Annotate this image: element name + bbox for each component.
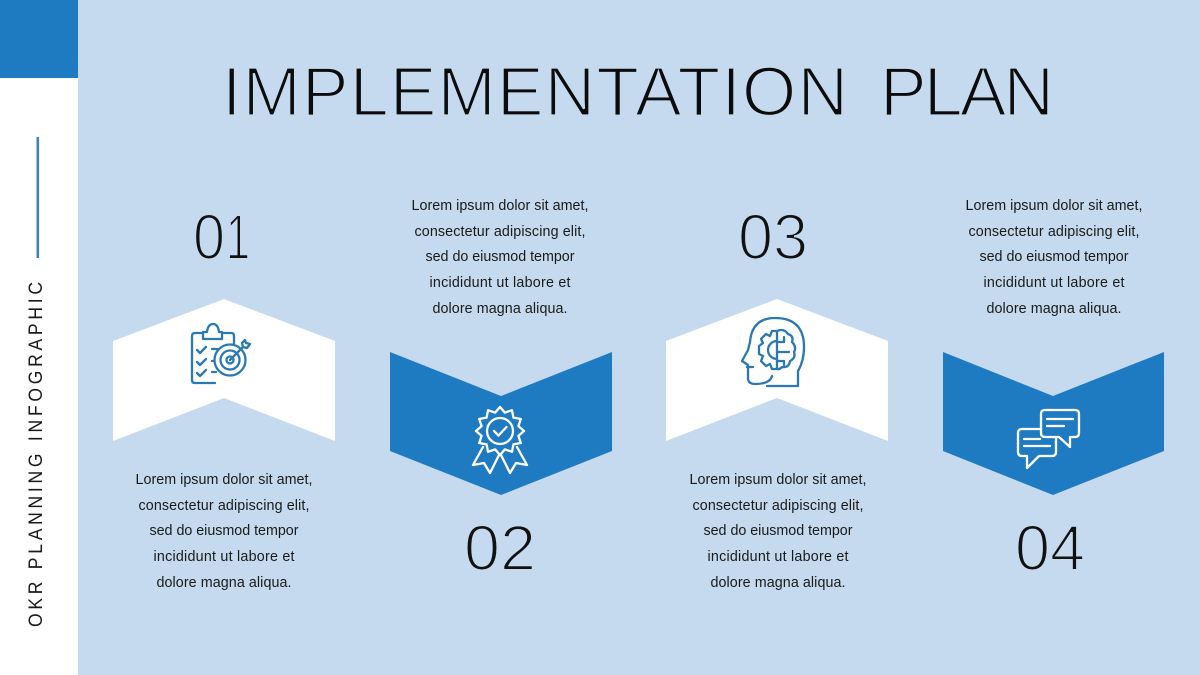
step 02 text xyxy=(412,198,588,317)
step 01 number xyxy=(193,201,250,273)
sidebar xyxy=(0,0,78,675)
step 03 text: incididunt ut labore et xyxy=(708,549,849,565)
step 03 number: 03 xyxy=(738,201,808,273)
step 01 number: 0 xyxy=(193,201,225,273)
step 02 xyxy=(390,198,612,584)
sidebar blue block xyxy=(0,0,78,78)
step 02 text: dolore magna aliqua. xyxy=(432,301,568,317)
step 02 text: Lorem ipsum dolor sit amet, xyxy=(412,198,588,214)
step 04 text: incididunt ut labore et xyxy=(984,275,1125,291)
step 03 text: consectetur adipiscing elit, xyxy=(692,498,864,514)
step 01 text xyxy=(136,472,312,591)
step 04 text: sed do eiusmod tempor xyxy=(980,249,1129,265)
step 03 shape xyxy=(666,299,888,441)
icon: head with gear and brain xyxy=(742,318,804,386)
step 04 text: consectetur adipiscing elit, xyxy=(968,224,1140,240)
step 03 text: dolore magna aliqua. xyxy=(710,575,846,591)
step 01 number: 1 xyxy=(226,201,250,273)
step 04 text: dolore magna aliqua. xyxy=(986,301,1122,317)
icon: chat bubbles xyxy=(1018,410,1079,468)
step 03 text xyxy=(690,472,866,591)
step 02 text: sed do eiusmod tempor xyxy=(426,249,575,265)
step 03 text: Lorem ipsum dolor sit amet, xyxy=(690,472,866,488)
step 02 shape xyxy=(390,352,612,495)
step 01 xyxy=(113,201,335,591)
step 01 text: sed do eiusmod tempor xyxy=(150,523,299,539)
title: IMPLEMENTATION xyxy=(222,52,848,130)
step 02 text: consectetur adipiscing elit, xyxy=(414,224,586,240)
step 03 xyxy=(666,201,888,591)
sidebar accent line xyxy=(36,137,39,258)
step 01 text: consectetur adipiscing elit, xyxy=(138,498,310,514)
step 03 text: sed do eiusmod tempor xyxy=(704,523,853,539)
step 04 text xyxy=(966,198,1142,317)
step 02 number: 02 xyxy=(464,512,536,584)
step 01 shape xyxy=(113,299,335,441)
step 02 text: incididunt ut labore et xyxy=(430,275,571,291)
step 04 text: Lorem ipsum dolor sit amet, xyxy=(966,198,1142,214)
step 04 number: 04 xyxy=(1015,512,1085,584)
step 04 shape xyxy=(943,352,1164,495)
sidebar vertical label: OKR PLANNING INFOGRAPHIC xyxy=(24,282,46,627)
icon: award badge xyxy=(473,407,527,473)
step 01 text: Lorem ipsum dolor sit amet, xyxy=(136,472,312,488)
step 01 text: incididunt ut labore et xyxy=(154,549,295,565)
title: PLAN xyxy=(880,52,1054,130)
step 04 xyxy=(943,198,1164,584)
step 01 text: dolore magna aliqua. xyxy=(156,575,292,591)
icon: clipboard with target xyxy=(192,324,250,383)
